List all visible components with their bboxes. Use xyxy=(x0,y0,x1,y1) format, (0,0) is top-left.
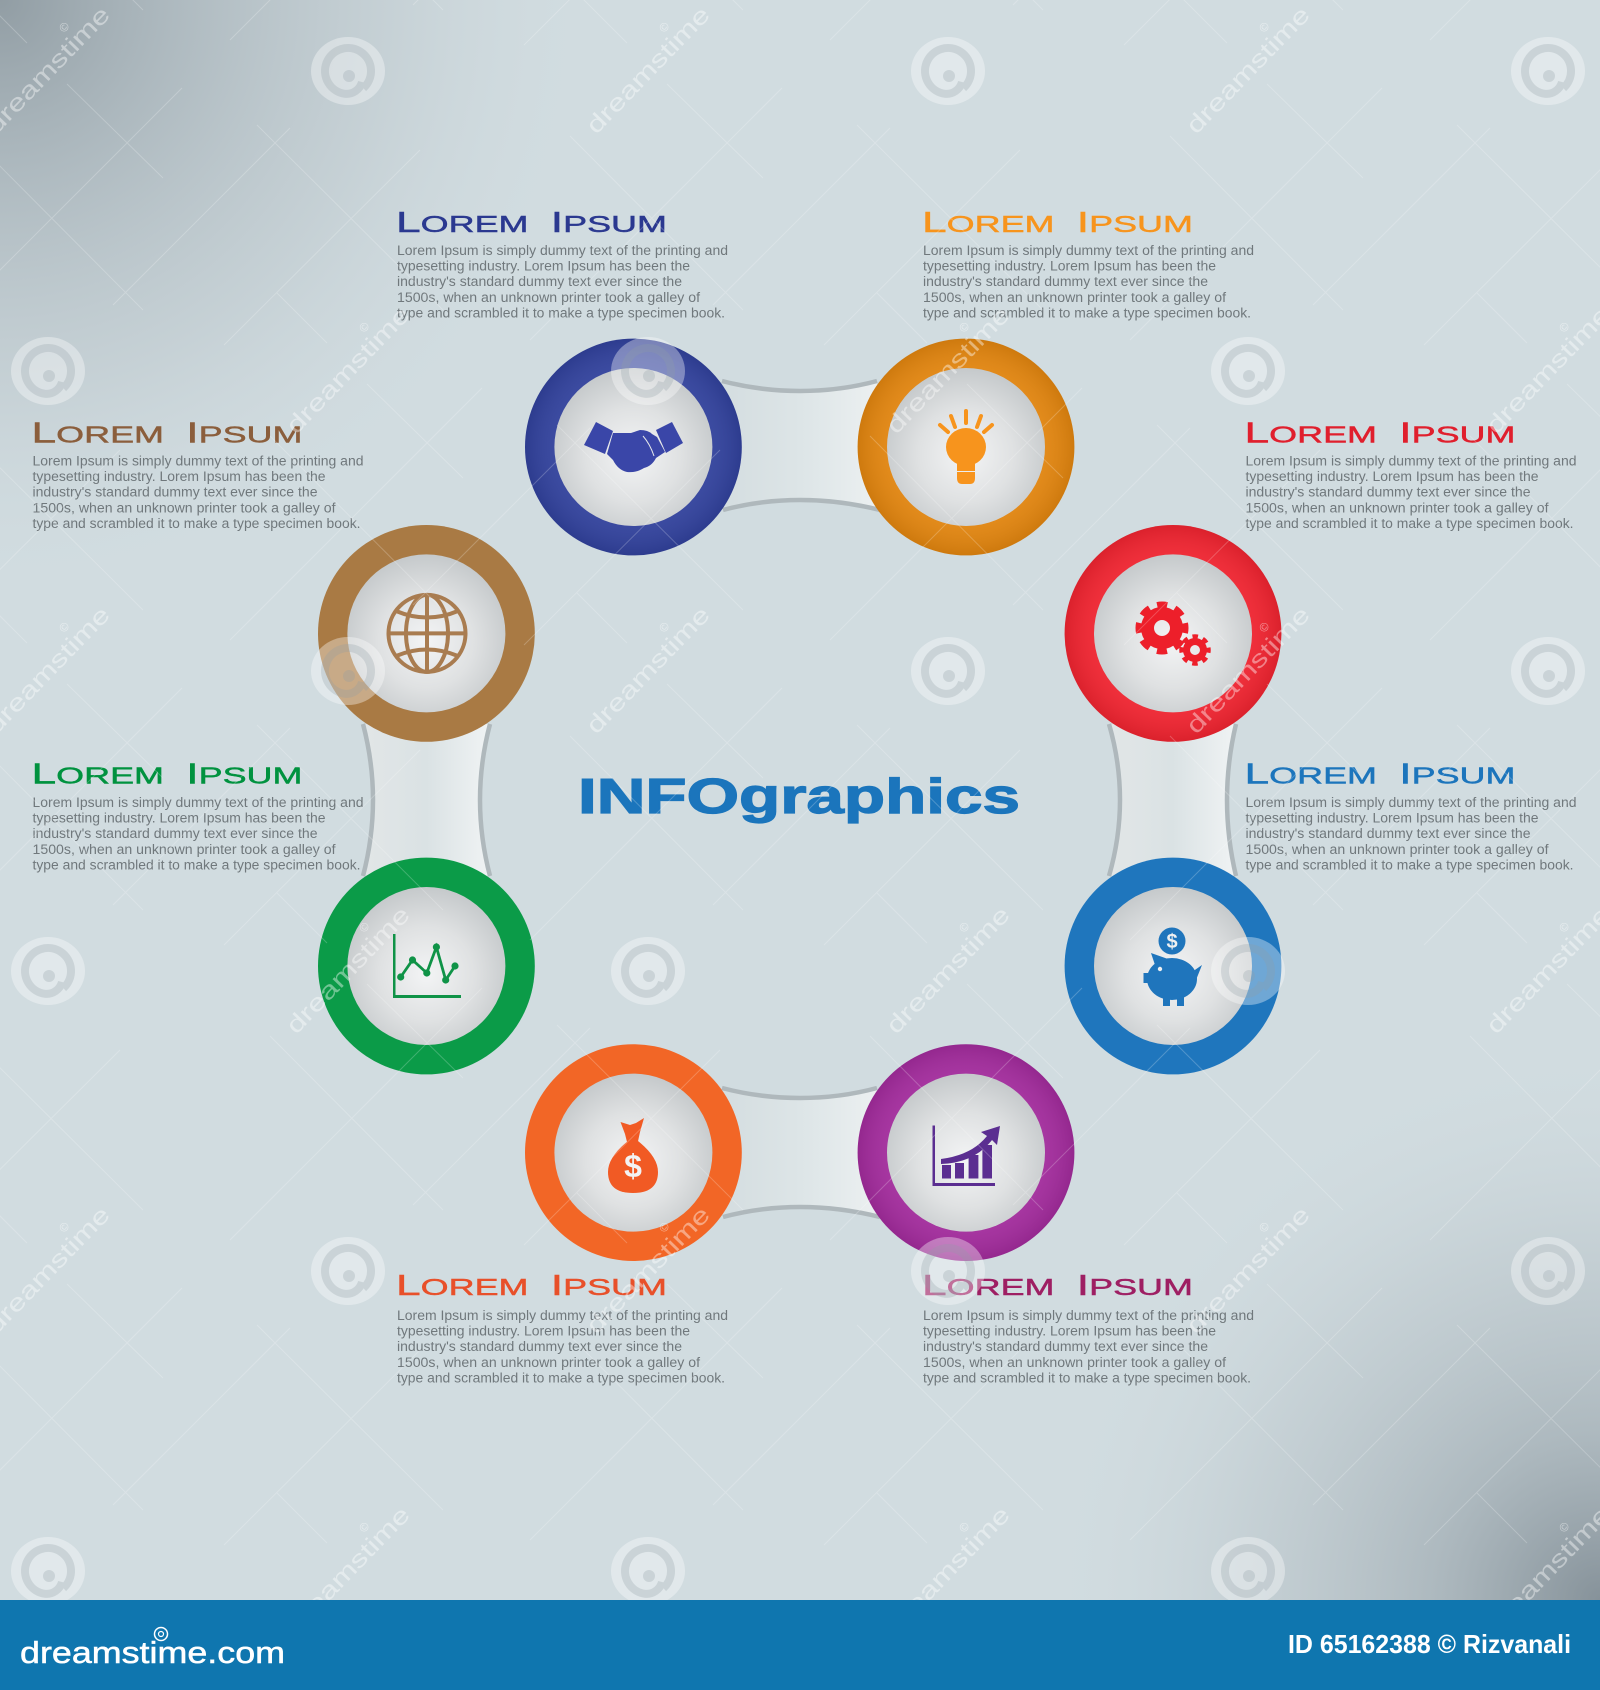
body copy: industry's standard dummy text ever since the xyxy=(397,1339,682,1354)
image credit: ID 65162388 © Rizvanali xyxy=(1288,1629,1571,1659)
body copy: 1500s, when an unknown printer took a galley of xyxy=(923,1355,1226,1370)
body copy: type and scrambled it to make a type specimen book. xyxy=(397,1370,725,1385)
body copy: 1500s, when an unknown printer took a galley of xyxy=(397,290,700,305)
body copy: Lorem Ipsum is simply dummy text of the printing and xyxy=(32,795,364,810)
watermark overlay: dreamstime xyxy=(881,901,1016,1039)
connector: top pair xyxy=(722,381,880,510)
heading: LOREM IPSUM xyxy=(1244,416,1515,449)
watermark overlay: © xyxy=(356,1519,372,1535)
body copy: 1500s, when an unknown printer took a galley of xyxy=(32,500,336,515)
watermark overlay: © xyxy=(1256,1219,1272,1235)
watermark overlay: dreamstime xyxy=(281,901,416,1039)
body copy: Lorem Ipsum is simply dummy text of the printing and xyxy=(923,243,1254,258)
body copy: industry's standard dummy text ever since the xyxy=(923,1339,1208,1354)
heading: LOREM IPSUM xyxy=(396,1269,667,1301)
watermark overlay: © xyxy=(956,319,972,335)
heading: LOREM IPSUM xyxy=(922,1269,1193,1301)
body copy xyxy=(397,1308,728,1385)
body copy: type and scrambled it to make a type specimen book. xyxy=(32,516,360,531)
body copy: industry's standard dummy text ever since the xyxy=(1246,826,1530,841)
heading: LOREM IPSUM xyxy=(396,206,667,238)
body copy: industry's standard dummy text ever since the xyxy=(923,274,1208,289)
watermark overlay: dreamstime xyxy=(1481,301,1600,439)
body copy: 1500s, when an unknown printer took a galley of xyxy=(397,1355,700,1370)
body copy xyxy=(32,454,364,531)
body copy: typesetting industry. Lorem Ipsum has been the xyxy=(397,259,690,274)
body copy: 1500s, when an unknown printer took a galley of xyxy=(923,290,1226,305)
watermark overlay: dreamstime xyxy=(881,301,1016,439)
icon: line chart xyxy=(393,934,461,998)
watermark overlay: © xyxy=(56,19,72,35)
watermark overlay: © xyxy=(956,1519,972,1535)
body copy: 1500s, when an unknown printer took a galley of xyxy=(1246,500,1549,515)
watermark overlay: dreamstime xyxy=(1181,1,1316,139)
body copy: type and scrambled it to make a type specimen book. xyxy=(1246,857,1574,872)
heading: LOREM IPSUM xyxy=(1244,757,1515,790)
icon: money bag: $ xyxy=(624,1148,642,1184)
heading: LOREM IPSUM xyxy=(32,416,302,449)
title: INFOgraphics xyxy=(578,770,1020,824)
text block: blue xyxy=(1244,757,1576,872)
watermark overlay: dreamstime xyxy=(581,601,716,739)
watermark overlay: dreamstime xyxy=(281,301,416,439)
body copy: 1500s, when an unknown printer took a galley of xyxy=(1246,842,1549,857)
body copy: Lorem Ipsum is simply dummy text of the printing and xyxy=(32,454,364,468)
icon: piggy bank: $ xyxy=(1166,931,1178,953)
body copy: Lorem Ipsum is simply dummy text of the printing and xyxy=(397,243,728,258)
watermark overlay: dreamstime xyxy=(881,1501,1016,1639)
body copy xyxy=(1246,454,1576,531)
icon: money bag xyxy=(608,1118,658,1193)
watermark overlay: © xyxy=(1256,19,1272,35)
watermark overlay: dreamstime xyxy=(581,1,716,139)
watermark overlay: © xyxy=(1256,619,1272,635)
text block: magenta xyxy=(922,1269,1254,1385)
body copy: Lorem Ipsum is simply dummy text of the printing and xyxy=(397,1308,728,1323)
circle: handshake (navy) xyxy=(525,339,742,555)
circle: line chart (green) xyxy=(318,858,535,1074)
watermark overlay: dreamstime xyxy=(1181,1201,1316,1339)
body copy: industry's standard dummy text ever since the xyxy=(32,485,318,500)
body copy: Lorem Ipsum is simply dummy text of the printing and xyxy=(923,1308,1254,1323)
heading: LOREM IPSUM xyxy=(922,206,1193,238)
watermark overlay: © xyxy=(656,19,672,35)
footer bar xyxy=(0,1600,1600,1690)
icon: rising chart xyxy=(932,1126,1000,1186)
body copy: typesetting industry. Lorem Ipsum has been the xyxy=(923,259,1216,274)
text block: brown xyxy=(32,416,364,531)
body copy: 1500s, when an unknown printer took a galley of xyxy=(32,842,336,857)
body copy: type and scrambled it to make a type specimen book. xyxy=(32,857,360,872)
circle: light bulb (orange) xyxy=(858,339,1074,555)
icon: piggy bank xyxy=(1144,928,1202,1006)
body copy: typesetting industry. Lorem Ipsum has been the xyxy=(923,1324,1216,1339)
circle: money bag (orange-red) xyxy=(525,1044,742,1261)
body copy: typesetting industry. Lorem Ipsum has been the xyxy=(32,811,326,826)
text block: orange-red xyxy=(396,1269,728,1385)
circle: piggy bank (blue) xyxy=(1065,858,1281,1074)
watermark overlay: dreamstime xyxy=(281,1501,416,1639)
body copy xyxy=(397,243,728,320)
watermark overlay: © xyxy=(56,1219,72,1235)
watermark overlay: © xyxy=(956,919,972,935)
body copy: type and scrambled it to make a type specimen book. xyxy=(1246,516,1574,531)
icon: light bulb xyxy=(940,411,992,484)
text block: navy xyxy=(396,206,728,320)
watermark overlay: © xyxy=(656,619,672,635)
body copy: typesetting industry. Lorem Ipsum has been the xyxy=(397,1324,690,1339)
icon: handshake xyxy=(584,422,683,472)
text block: orange xyxy=(922,206,1254,320)
text block: red xyxy=(1244,416,1576,531)
watermark overlay: dreamstime xyxy=(581,1201,716,1339)
watermark overlay: dreamstime xyxy=(1481,901,1600,1039)
footer logo: dreamstime.com xyxy=(20,1635,285,1670)
watermark overlay: © xyxy=(656,1219,672,1235)
watermark overlay: © xyxy=(56,619,72,635)
watermark overlay: © xyxy=(1556,919,1572,935)
body copy xyxy=(923,243,1254,320)
body copy: industry's standard dummy text ever since the xyxy=(397,274,682,289)
connector: right pair xyxy=(1109,724,1236,876)
connector: bottom pair xyxy=(722,1088,880,1217)
circle: globe (brown) xyxy=(318,525,535,742)
body copy xyxy=(1246,795,1576,872)
body copy: type and scrambled it to make a type specimen book. xyxy=(923,305,1251,320)
connector: left pair xyxy=(363,724,490,876)
circle: gears (red) xyxy=(1065,525,1281,742)
body copy: Lorem Ipsum is simply dummy text of the printing and xyxy=(1246,454,1576,468)
body copy: typesetting industry. Lorem Ipsum has been the xyxy=(1246,469,1538,484)
body copy: industry's standard dummy text ever since the xyxy=(1246,485,1530,500)
watermark overlay: dreamstime xyxy=(1481,1501,1600,1639)
body copy xyxy=(923,1308,1254,1385)
body copy: typesetting industry. Lorem Ipsum has been the xyxy=(1246,811,1538,826)
body copy xyxy=(32,795,364,872)
circle: rising chart (purple) xyxy=(858,1044,1074,1261)
text block: green xyxy=(32,757,364,872)
body copy: industry's standard dummy text ever since the xyxy=(32,826,318,841)
watermark overlay: © xyxy=(1556,1519,1572,1535)
heading: LOREM IPSUM xyxy=(32,757,302,790)
body copy: type and scrambled it to make a type specimen book. xyxy=(923,1370,1251,1385)
body copy: type and scrambled it to make a type specimen book. xyxy=(397,305,725,320)
watermark overlay: © xyxy=(1556,319,1572,335)
body copy: Lorem Ipsum is simply dummy text of the printing and xyxy=(1246,795,1576,810)
watermark overlay: dreamstime xyxy=(1181,601,1316,739)
icon: gears xyxy=(1139,605,1208,664)
icon: globe xyxy=(388,595,466,672)
watermark overlay: © xyxy=(356,319,372,335)
body copy: typesetting industry. Lorem Ipsum has been the xyxy=(32,469,326,484)
watermark overlay: © xyxy=(356,919,372,935)
